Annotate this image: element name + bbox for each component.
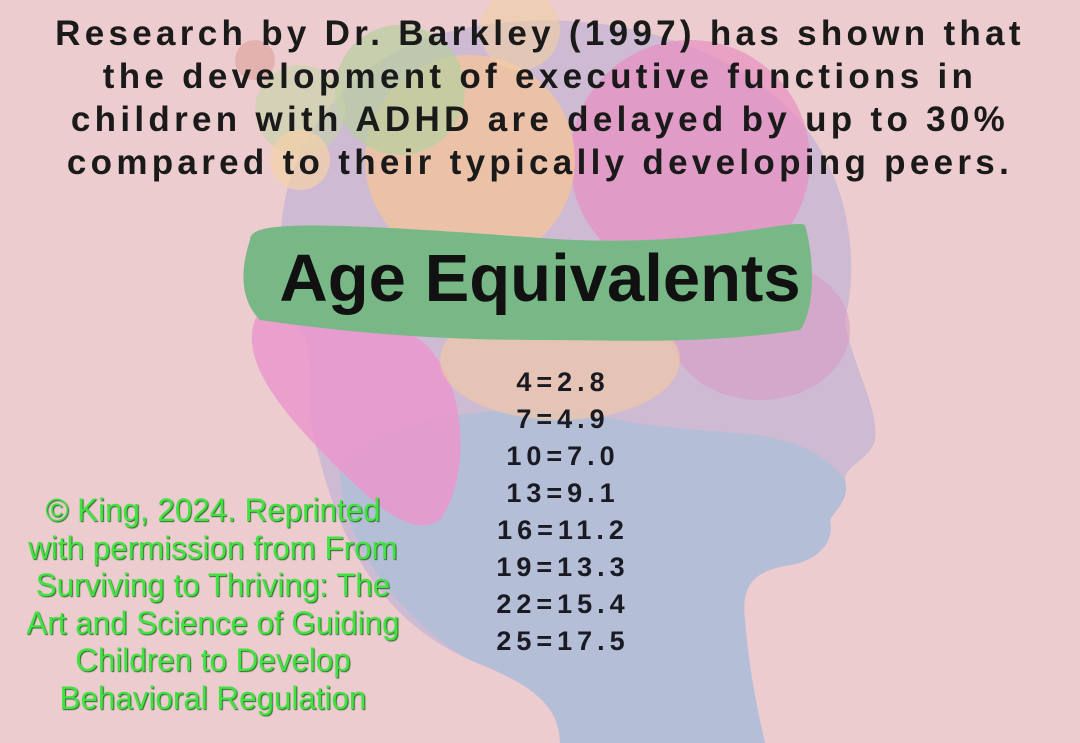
credit text: Behavioral Regulation [60,680,366,716]
list: age equivalents numbers: 19=13.3 [496,552,630,582]
blob: orange behind numbers [440,300,680,420]
list: age equivalents numbers: 4=2.8 [516,367,610,397]
blob: lower blue [340,411,846,743]
list: age equivalents numbers: 7=4.9 [516,404,610,434]
list: age equivalents numbers: 13=9.1 [506,478,620,508]
blob: orange [365,55,575,265]
credit text: Art and Science of Guiding [26,604,399,640]
list: age equivalents numbers: 25=17.5 [496,626,630,656]
credit text: with permission from From [28,530,398,566]
credit text [26,492,399,718]
heading: Age Equivalents: Age Equivalents [279,241,801,316]
blob: pink top right [570,40,810,280]
list: age equivalents numbers [496,367,630,656]
title text block: the development of executive functions in [103,57,977,96]
green band [243,224,812,341]
title text block: Research by Dr. Barkley (1997) has shown that [55,14,1025,53]
blob: pink left lobe [252,303,460,525]
title text block: children with ADHD are delayed by up to 30% [71,100,1009,139]
blob: green circles [335,25,465,155]
list: age equivalents numbers: 16=11.2 [497,515,629,545]
list: age equivalents numbers: 22=15.4 [496,589,630,619]
credit text: Surviving to Thriving: The [36,567,390,603]
list: age equivalents numbers: 10=7.0 [506,441,620,471]
title text block [55,14,1025,182]
head shape [281,20,876,743]
title text block: compared to their typically developing peers. [67,143,1013,182]
credit text: © King, 2024. Reprinted [45,492,381,528]
credit text: Children to Develop [75,642,351,678]
